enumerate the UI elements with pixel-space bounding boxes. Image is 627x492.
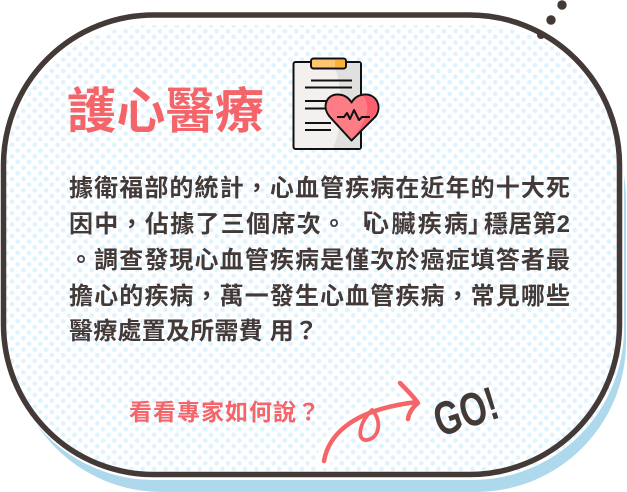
body text: 醫療處置及所需費 用？ <box>69 318 318 345</box>
icon: clipboard with heart <box>294 58 379 149</box>
body text: 據衛福部的統計，心血管疾病在近年的十大死 <box>69 175 570 202</box>
body text: 擔心的疾病，萬一發生心血管疾病，常見哪些 <box>69 283 570 310</box>
body text: 穩居第2 <box>484 211 570 238</box>
GO label: GO! <box>427 377 505 447</box>
body text <box>69 175 570 345</box>
icon: curly arrow <box>324 383 418 461</box>
body text: 。調查發現心血管疾病是僅次於癌症填答者最 <box>69 247 570 274</box>
body text: 心臟疾病 <box>365 211 468 238</box>
decorative dots top right <box>537 0 567 39</box>
title: 護心醫療 <box>67 85 264 139</box>
body text: 」 <box>468 211 492 238</box>
body text: 因中，佔據了三個席次。 <box>69 210 346 238</box>
body text: 「 <box>349 211 373 238</box>
call to action text: 看看專家如何說？ <box>129 399 320 425</box>
